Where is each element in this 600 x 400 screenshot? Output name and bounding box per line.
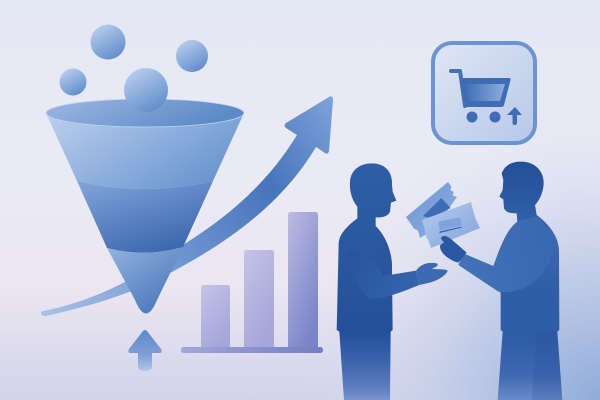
people exchanging tickets [337, 162, 562, 400]
growth arrow [41, 96, 333, 316]
funnel top band [46, 113, 244, 189]
cart card [433, 43, 535, 143]
funnel bottom tip [107, 247, 183, 314]
left person [337, 163, 448, 400]
left person arm [347, 250, 419, 299]
right person inner leg shading [532, 332, 562, 400]
balls entering the funnel [60, 24, 208, 112]
icon: small up arrow [507, 107, 522, 125]
right person arm [458, 217, 552, 292]
front ticket [422, 202, 480, 248]
back ticket window [423, 198, 451, 218]
funnel [46, 99, 244, 314]
tickets [406, 182, 480, 248]
back ticket [406, 182, 457, 238]
small up arrow [128, 330, 162, 371]
funnel middle band [77, 181, 213, 253]
left person hand [416, 263, 448, 285]
right person [440, 162, 562, 400]
right person hand [440, 236, 467, 263]
bar chart [181, 212, 323, 353]
funnel rim [46, 99, 244, 127]
icon: shopping cart [451, 71, 522, 125]
front ticket label [438, 217, 462, 230]
